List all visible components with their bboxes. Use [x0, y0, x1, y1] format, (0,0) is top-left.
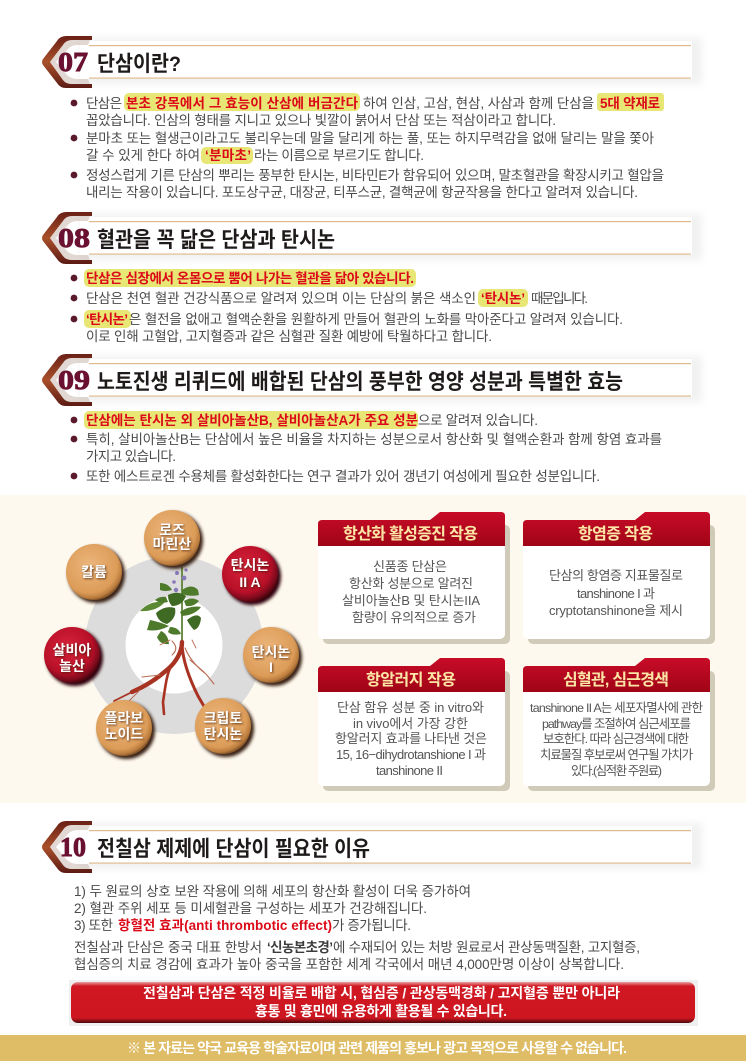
card: 항알러지 작용: 15, 16−dihydrotanshione I 과 — [336, 747, 486, 762]
card: 항산화 활성증진 작용: 항산화 활성증진 작용 — [343, 525, 478, 543]
card: 항알러지 작용 — [318, 658, 510, 791]
card: 항알러지 작용: tanshinone II — [376, 763, 443, 778]
circle: 칼륨 — [66, 544, 125, 603]
card: 항산화 활성증진 작용: 살비아놀산B 및 탄시논IIA — [342, 593, 480, 608]
card: 항알러지 작용: 단삼 함유 성분 중 in vitro와 — [337, 700, 484, 715]
section 10 text: 항혈전 효과(anti thrombotic effect) — [118, 917, 332, 933]
section 10 text: ‘신농본초경’ — [267, 940, 333, 955]
section 08 bullet text: 때문입니다. — [531, 291, 588, 306]
circle: 플라보 노이드: 플라보 — [105, 710, 143, 726]
section 08 bullet text: 이로 인해 고혈압, 고지혈증과 같은 심혈관 질환 예방에 탁월하다고 합니다. — [86, 329, 492, 344]
section 10 text: 전칠삼과 단삼은 중국 대표 한방서 — [74, 940, 262, 955]
card: 항알러지 작용: 항알러지 효과를 나타낸 것은 — [335, 731, 487, 746]
card: 항염증 작용: 항염증 작용 — [578, 525, 653, 543]
section 08 bullet text: 은 혈전을 없애고 혈액순환을 원활하게 만들어 혈관의 노화를 막아준다고 알려져 있습니다. — [129, 312, 623, 327]
circle: 살비아 놀산: 살비아 — [53, 642, 91, 658]
section 07 bullet text: 꼽았습니다. 인삼의 형태를 지니고 있으나 빛깔이 붉어서 단삼 또는 적삼이라고 합니다. — [86, 113, 556, 128]
panel: cream background — [0, 495, 746, 803]
section 10 text: 협심증의 치료 경감에 효과가 높아 중국을 포함한 세계 각국에서 매년 4,000만명 이상이 상복합니다. — [74, 957, 624, 972]
section 07 header — [42, 36, 702, 88]
section 10 text — [74, 884, 640, 972]
circle: 탄시논 II A: II A — [239, 574, 261, 590]
circle: 플라보 노이드 — [96, 700, 155, 759]
section 07 bullet text — [71, 93, 664, 200]
section 09 bullet text: 으로 알려져 있습니다. — [418, 413, 538, 428]
card: 항산화 활성증진 작용 — [318, 512, 510, 644]
footer notice band — [0, 1035, 746, 1061]
card: 항염증 작용: cryptotanshinone을 제시 — [549, 603, 683, 618]
circle: 플라보 노이드: 노이드 — [105, 726, 143, 742]
section 07 bullet text: 정성스럽게 기른 단삼의 뿌리는 풍부한 탄시논, 비타민E가 함유되어 있으며, 말초혈관을 확장시키고 혈압을 — [86, 168, 664, 183]
card: 심혈관, 심근경색: tanshinone II A는 세포자멸사에 관한 — [530, 701, 703, 715]
section 09 bullet text: 가지고 있습니다. — [86, 449, 176, 464]
card: 심혈관, 심근경색: 심혈관, 심근경색 — [563, 670, 669, 689]
section number 09: 09 — [58, 365, 90, 395]
section 08 bullet text: ‘탄시논’ — [481, 291, 525, 306]
card: 심혈관, 심근경색: pathway를 조절하여 심근세포를 — [542, 717, 691, 731]
callout: red summary button: 전칠삼과 단삼은 적정 비율로 배합 시, 협심증 / 관상동맥경화 / 고지혈증 뿐만 아니라 — [143, 985, 620, 1001]
card: 항알러지 작용: in vivo에서 가장 강한 — [353, 716, 468, 731]
card: 항산화 활성증진 작용: 신품종 단삼은 — [373, 559, 447, 574]
card: 항염증 작용: 단삼의 항염증 지표물질로 — [549, 568, 683, 583]
circle: 탄시논 II A: 탄시논 — [231, 557, 269, 573]
section 07 bullet text: 단삼은 — [86, 96, 122, 111]
circle: 로즈 마린산: 마린산 — [153, 536, 191, 552]
card: 심혈관, 심근경색: 치료물질 후보로써 연구될 가치가 — [540, 748, 693, 762]
card: 항염증 작용 — [523, 512, 715, 644]
section 07 bullet text: 본초 강목에서 그 효능이 산삼에 버금간다 — [126, 96, 359, 111]
section 07 bullet text: 갈 수 있게 한다 하여 — [86, 148, 200, 163]
roots — [114, 640, 214, 714]
section 08 bullet text: 단삼은 천연 혈관 건강식품으로 알려져 있으며 이는 단삼의 붉은 색소인 — [86, 291, 476, 306]
card: 항알러지 작용: 항알러지 작용 — [366, 671, 456, 689]
section 09 bullet text: 또한 에스트로겐 수용체를 활성화한다는 연구 결과가 있어 갱년기 여성에게 필요한 성분입니다. — [86, 469, 600, 484]
section 09 bullet text — [71, 411, 662, 484]
section 07 bullet text: 분마초 또는 혈생근이라고도 불리우는데 말을 달리게 하는 풀, 또는 하지무력감을 없애 달리는 말을 쫓아 — [86, 131, 655, 146]
section 10 text: 3) 또한 — [74, 918, 113, 933]
callout: red summary button — [69, 980, 698, 1026]
section 07 bullet text: 내리는 작용이 있습니다. 포도상구균, 대장균, 티푸스균, 결핵균에 항균작용을 한다고 알려져 있습니다. — [86, 185, 638, 200]
section 10 text: 에 수재되어 있는 처방 원료로서 관상동맥질환, 고지혈증, — [333, 940, 640, 955]
circle: 크립토 탄시논: 크립토 — [204, 710, 242, 726]
section number 07: 07 — [58, 47, 88, 77]
section 10 text: 1) 두 원료의 상호 보완 작용에 의해 세포의 항산화 활성이 더욱 증가하여 — [74, 884, 471, 899]
section title 10: 전칠삼 제제에 단삼이 필요한 이유 — [97, 837, 370, 861]
circle: 탄시논 I — [243, 627, 302, 686]
card: 항염증 작용: tanshinone I 과 — [577, 586, 655, 601]
circle: 살비아 놀산 — [44, 627, 103, 686]
section 07 bullet text: 5대 약재로 — [600, 96, 660, 111]
section 10 text: 가 증가됩니다. — [332, 918, 411, 933]
section 07 bullet text: 라는 이름으로 부르기도 합니다. — [254, 148, 424, 163]
circle: 크립토 탄시논 — [195, 698, 254, 757]
section 09 bullet text: 특히, 살비아놀산B는 단삼에서 높은 비율을 차지하는 성분으로서 항산화 및 혈액순환과 함께 항염 효과를 — [86, 432, 662, 447]
card: 심혈관, 심근경색: 있다.(심적환 주원료) — [571, 764, 662, 778]
section number 08: 08 — [58, 223, 90, 253]
circle: 살비아 놀산: 놀산 — [59, 658, 85, 674]
section number 10: 10 — [60, 832, 86, 862]
callout: red summary button: 흉통 및 흉민에 유용하게 활용될 수 있습니다. — [255, 1003, 507, 1019]
circle: 탄시논 I: 탄시논 — [252, 644, 290, 660]
section 07 bullet text: 하여 인삼, 고삼, 현삼, 사삼과 함께 단삼을 — [363, 96, 594, 111]
circle: 로즈 마린산 — [144, 510, 203, 569]
icon: danshen plant — [114, 567, 214, 714]
section 09 header — [42, 354, 702, 406]
circle: 칼륨: 칼륨 — [81, 564, 107, 580]
card: 항산화 활성증진 작용: 함량이 유의적으로 증가 — [352, 610, 476, 625]
card: 항산화 활성증진 작용: 항산화 성분으로 알려진 — [349, 576, 473, 591]
section title 07: 단삼이란? — [97, 52, 181, 76]
circle: 로즈 마린산: 로즈 — [159, 522, 185, 538]
section 09 bullet text: 단삼에는 탄시논 외 살비아놀산B, 살비아놀산A가 주요 성분 — [86, 413, 418, 428]
circle: 크립토 탄시논: 탄시논 — [204, 726, 242, 742]
card: 심혈관, 심근경색: 보호한다. 따라 심근경색에 대한 — [543, 732, 689, 746]
gray ring — [85, 556, 263, 734]
circle: 탄시논 I: I — [269, 659, 273, 675]
section 08 bullet text — [71, 269, 623, 344]
diagram: danshen components — [44, 510, 302, 759]
section 10 text: 2) 혈관 주위 세포 등 미세혈관을 구성하는 세포가 건강해집니다. — [74, 901, 427, 916]
section 08 header — [42, 212, 702, 264]
card: 심혈관, 심근경색 — [523, 658, 715, 791]
section title 08: 혈관을 꼭 닮은 단삼과 탄시논 — [97, 228, 335, 252]
section 08 bullet text: 단삼은 심장에서 온몸으로 뿜어 나가는 혈관을 닮아 있습니다. — [86, 270, 414, 286]
section 08 bullet text: ‘탄시논’ — [86, 312, 128, 327]
circle: 탄시논 II A — [222, 546, 281, 605]
section 07 bullet text: ‘분마초’ — [205, 148, 251, 163]
section title 09: 노토진생 리퀴드에 배합된 단삼의 풍부한 영양 성분과 특별한 효능 — [97, 370, 623, 394]
footer notice band: ※ 본 자료는 약국 교육용 학술자료이며 관련 제품의 홍보나 광고 목적으로 사용할 수 없습니다. — [127, 1040, 627, 1056]
section 10 header — [42, 821, 702, 873]
